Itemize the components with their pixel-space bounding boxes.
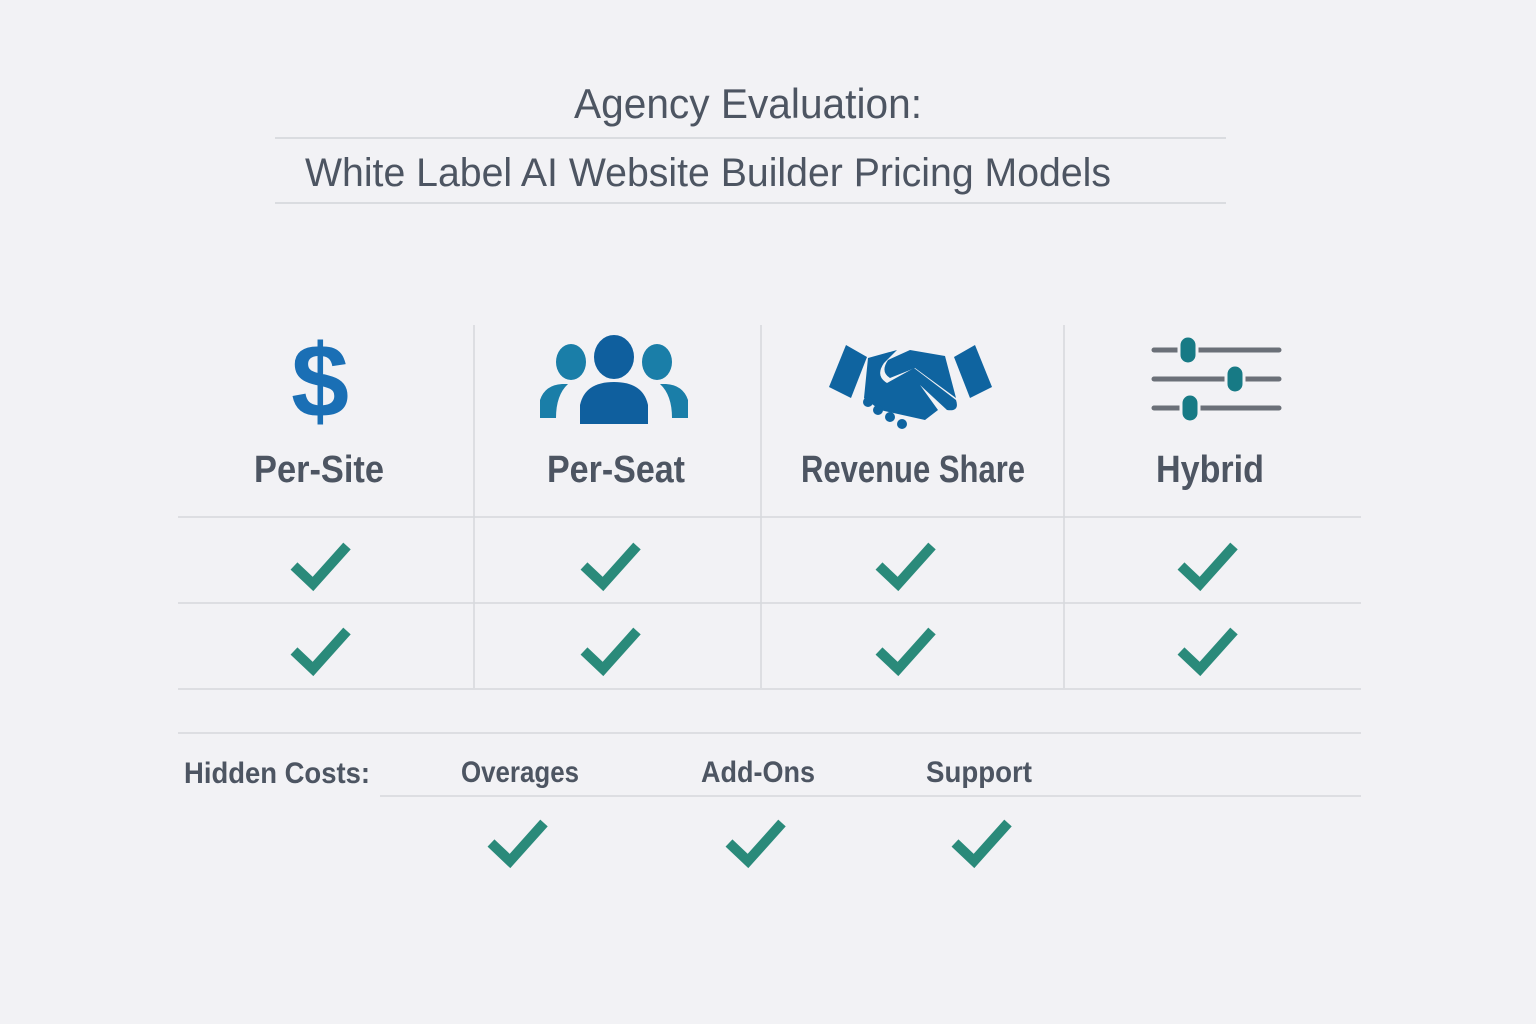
- hidden costs section: Support: [926, 756, 1032, 789]
- checkmarks: [294, 546, 1234, 669]
- hidden costs section: Overages: [461, 756, 579, 789]
- title: [275, 80, 1226, 203]
- icon: dollar: $: [291, 324, 349, 440]
- comparison table: [178, 324, 1361, 689]
- title: Agency Evaluation:: [574, 80, 922, 127]
- column headings: Revenue Share: [801, 449, 1025, 491]
- column headings: Hybrid: [1156, 449, 1264, 491]
- hidden costs section: Add-Ons: [701, 756, 815, 789]
- column headings: Per-Site: [254, 449, 384, 491]
- hidden costs section: Hidden Costs:: [184, 757, 370, 790]
- icon: handshake: [829, 345, 992, 429]
- column headings: [254, 449, 1264, 491]
- column headings: Per-Seat: [547, 449, 685, 491]
- icon: people: [540, 335, 688, 424]
- subtitle: White Label AI Website Builder Pricing Models: [305, 151, 1111, 195]
- icon: sliders: [1154, 336, 1279, 422]
- hidden costs section: [178, 733, 1361, 861]
